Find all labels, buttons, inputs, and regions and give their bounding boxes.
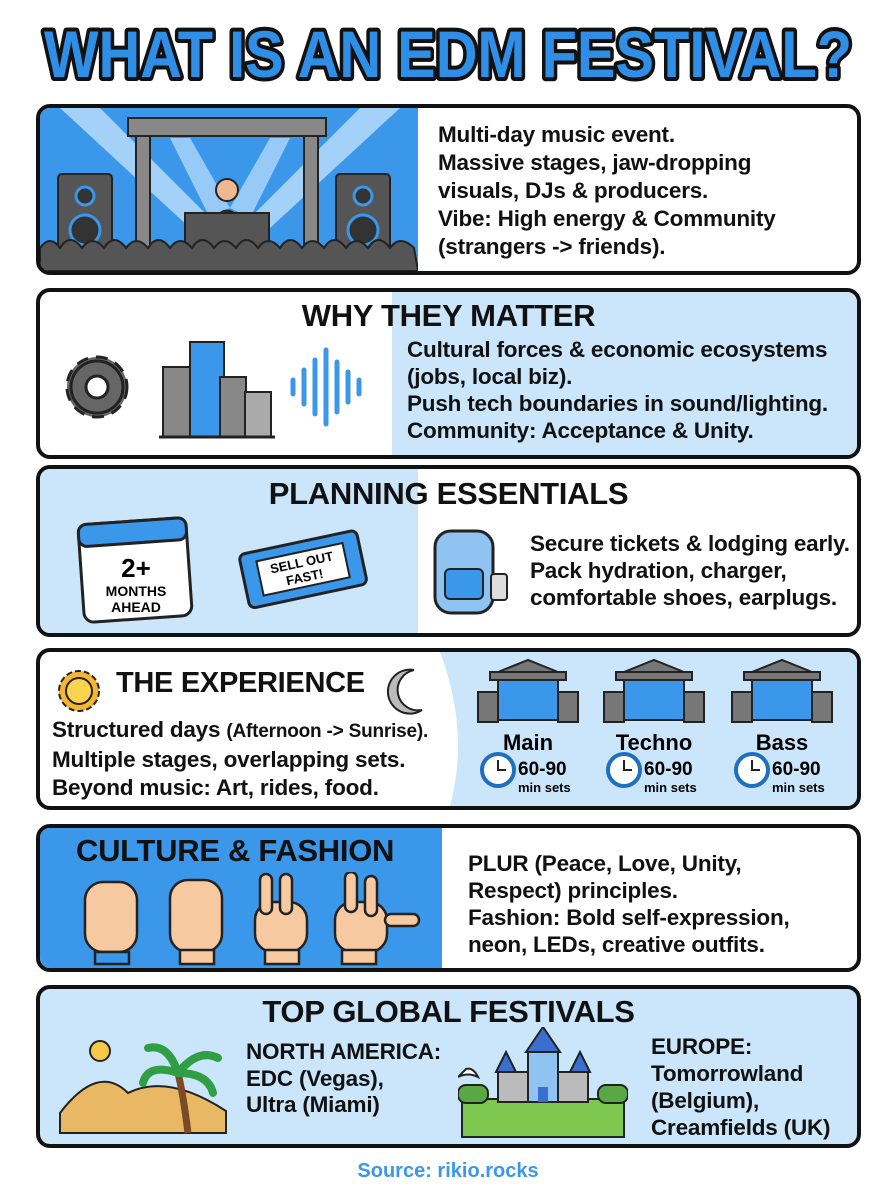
panel: why they matter	[36, 288, 861, 459]
text: experience	[52, 717, 428, 800]
text: culture: Fashion: Bold self-expression,	[468, 905, 790, 930]
stages: main, techno, bass	[477, 658, 833, 795]
heading: top global festivals: TOP GLOBAL FESTIVALS	[262, 994, 635, 1029]
panel: planning essentials	[36, 465, 861, 637]
text: north america: NORTH AMERICA:	[246, 1039, 441, 1064]
text: north america: EDC (Vegas),	[246, 1066, 384, 1090]
stages: main, techno, bass: 60-90	[644, 759, 693, 780]
icon: moon	[386, 668, 422, 715]
icon: ticket	[238, 530, 368, 609]
icon: ticket: SELL OUT	[269, 548, 335, 576]
icon: sun	[58, 670, 100, 712]
stages: main, techno, bass: min sets	[772, 780, 825, 795]
text: planning: Secure tickets & lodging early.	[530, 531, 850, 556]
icon: calendar: MONTHS	[106, 583, 166, 599]
stages: main, techno, bass: Techno	[616, 730, 692, 755]
icon: calendar: 2+	[121, 553, 151, 583]
heading: culture & fashion: CULTURE & FASHION	[76, 833, 394, 868]
text: intro description: Vibe: High energy & Community	[438, 206, 776, 231]
panel: top global festivals	[36, 985, 861, 1148]
text: intro description: (strangers -> friends).	[438, 234, 665, 259]
stages: main, techno, bass: Bass	[756, 730, 808, 755]
text: culture: PLUR (Peace, Love, Unity,	[468, 851, 741, 876]
stages: main, techno, bass: Main	[503, 730, 553, 755]
text: intro description: visuals, DJs & producers.	[438, 178, 708, 203]
icon: calendar: AHEAD	[111, 599, 161, 615]
text: intro description: Multi-day music event.	[438, 122, 675, 147]
text: planning: comfortable shoes, earplugs.	[530, 585, 837, 610]
text: why they matter	[407, 337, 828, 443]
panel: the experience	[36, 648, 861, 810]
text: why they matter: (jobs, local biz).	[407, 364, 572, 389]
text: intro description	[438, 122, 776, 259]
icons: PLUR hands	[84, 872, 420, 966]
text: experience: Beyond music: Art, rides, food.	[52, 775, 379, 800]
text: north america: Ultra (Miami)	[246, 1092, 380, 1117]
stages: main, techno, bass: min sets	[644, 780, 697, 795]
illustration: DJ stage	[40, 108, 418, 271]
icon: ticket: FAST!	[285, 566, 325, 588]
icon: desert palm	[59, 1040, 227, 1134]
stages: main, techno, bass: 60-90	[518, 759, 567, 780]
text: europe: Tomorrowland	[651, 1061, 803, 1086]
text: europe: EUROPE:	[651, 1034, 752, 1059]
text: why they matter: Push tech boundaries in sound/lighting.	[407, 391, 828, 416]
source: Source: rikio.rocks	[357, 1160, 539, 1182]
text: experience: Structured days (Afternoon -> Sunrise).	[52, 717, 428, 742]
icon: castle	[458, 1027, 628, 1138]
text: intro description: Massive stages, jaw-dropping	[438, 150, 751, 175]
icon: backpack	[434, 530, 508, 614]
panel: culture & fashion	[36, 824, 861, 972]
text: europe: Creamfields (UK)	[651, 1115, 830, 1140]
heading: the experience: THE EXPERIENCE	[116, 667, 365, 699]
text: europe	[651, 1034, 830, 1140]
icons: gear, city, soundwave	[66, 341, 362, 438]
text: why they matter: Community: Acceptance & Unity.	[407, 418, 754, 443]
text: culture: neon, LEDs, creative outfits.	[468, 932, 765, 957]
text: europe: (Belgium),	[651, 1088, 759, 1113]
text: experience: Multiple stages, overlapping sets.	[52, 747, 405, 772]
text: planning: Pack hydration, charger,	[530, 558, 787, 583]
text: north america	[246, 1039, 441, 1117]
stages: main, techno, bass: 60-90	[772, 759, 821, 780]
icon: calendar	[76, 516, 194, 624]
text: culture	[468, 851, 790, 957]
text: why they matter: Cultural forces & economic ecosystems	[407, 337, 827, 362]
stages: main, techno, bass: min sets	[518, 780, 571, 795]
text: planning	[530, 531, 850, 610]
panel: intro	[36, 104, 861, 275]
heading: why they matter: WHY THEY MATTER	[302, 298, 595, 333]
heading: planning essentials: PLANNING ESSENTIALS	[269, 476, 628, 511]
text: culture: Respect) principles.	[468, 878, 678, 903]
